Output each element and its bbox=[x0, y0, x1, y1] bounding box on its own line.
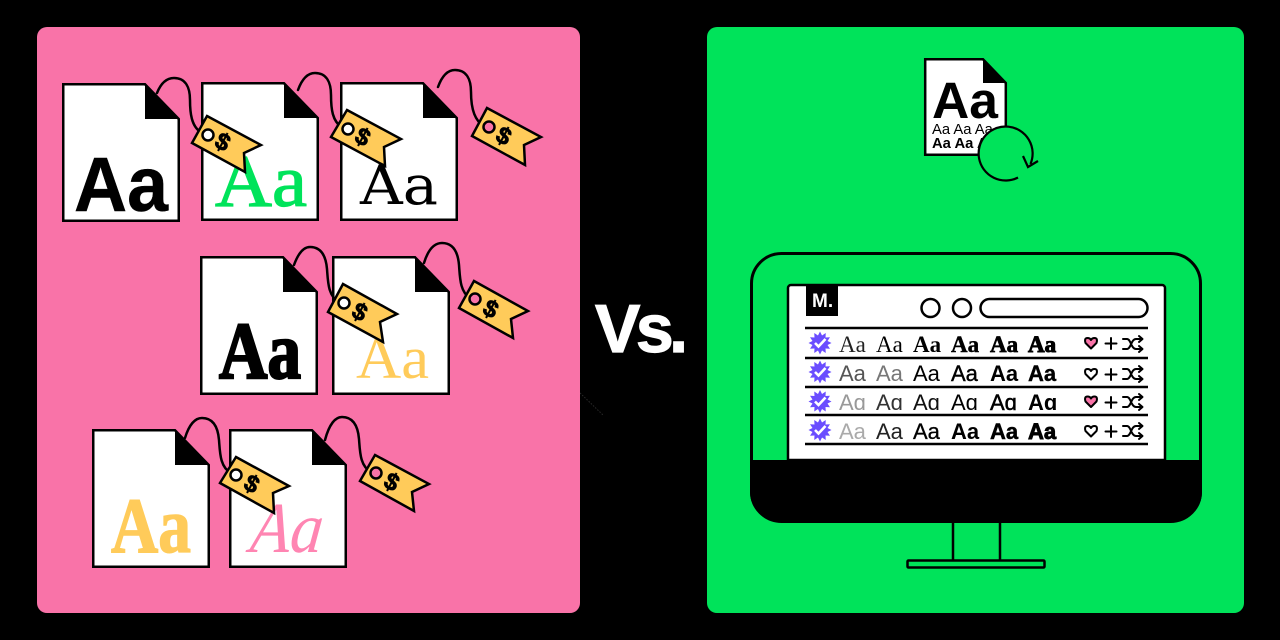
browser window bbox=[788, 285, 1165, 460]
row 4: Aa bbox=[913, 419, 941, 444]
row 3: Aɑ bbox=[913, 390, 940, 415]
icon: font file with refresh cycle: Aa Aa Aa bbox=[932, 122, 994, 138]
file: green serif Aa: Aa bbox=[215, 141, 307, 223]
row 2: Aa bbox=[990, 361, 1019, 386]
row 2: Aa bbox=[913, 361, 941, 386]
browser controls bbox=[922, 299, 1148, 317]
price tag 3: $ bbox=[491, 121, 516, 152]
file: yellow light serif Aa: Aa bbox=[356, 325, 429, 391]
row 4: Aa bbox=[990, 419, 1019, 444]
icon: font file with refresh cycle: Aa Aa Aa bbox=[932, 136, 997, 152]
price tag 1 bbox=[157, 78, 261, 172]
row 1: Aa bbox=[1028, 332, 1057, 357]
row 1: Aa bbox=[876, 332, 903, 357]
row 2: Aa bbox=[839, 361, 867, 386]
row 3: Aɑ bbox=[876, 390, 903, 415]
price tag 5: $ bbox=[478, 294, 503, 325]
row 1: Aa bbox=[951, 332, 980, 357]
file: green serif Aa bbox=[202, 83, 318, 223]
row 2 bbox=[839, 361, 1057, 386]
monitor stand bbox=[908, 522, 1044, 568]
row 4: Aa bbox=[1028, 419, 1057, 444]
heading: Vs.: Vs. bbox=[595, 291, 684, 367]
price tag 6 bbox=[185, 418, 289, 513]
row 2: Aa bbox=[876, 361, 904, 386]
row 3: Aɑ bbox=[1028, 390, 1057, 415]
file: pink italic Aa: Aa bbox=[244, 488, 328, 568]
price tag 2 bbox=[298, 73, 401, 166]
row 4: Aa bbox=[876, 419, 904, 444]
row 1: Aa bbox=[913, 332, 942, 357]
file: yellow light serif Aa bbox=[333, 257, 449, 394]
file: black slab Aa bbox=[341, 83, 457, 220]
logo: M.: M. bbox=[812, 291, 833, 312]
panel: green subscription bbox=[707, 27, 1244, 613]
icon: font file with refresh cycle bbox=[925, 59, 1038, 181]
row 4: Aa bbox=[951, 419, 980, 444]
row 2: Aa bbox=[951, 361, 979, 386]
row 2: Aa bbox=[1028, 361, 1057, 386]
row 3: Aɑ bbox=[839, 390, 866, 415]
file: yellow bold serif Aa: Aa bbox=[111, 482, 191, 569]
row 3: Aɑ bbox=[990, 390, 1017, 415]
file: black sans Aa: Aa bbox=[74, 142, 169, 228]
monitor chin bbox=[750, 460, 1202, 522]
file: black slab Aa: Aa bbox=[359, 154, 438, 217]
price tag 1: $ bbox=[210, 127, 235, 158]
price tag 4: $ bbox=[347, 297, 372, 328]
row 3 bbox=[839, 390, 1057, 415]
logo: M. bbox=[806, 285, 838, 316]
price tag 5 bbox=[424, 243, 528, 338]
price tag 4 bbox=[294, 247, 397, 342]
file: yellow bold serif Aa bbox=[93, 430, 209, 569]
icon: font file with refresh cycle: Aa bbox=[932, 72, 999, 129]
price tag 3 bbox=[438, 70, 541, 165]
row 1: Aa bbox=[839, 332, 866, 357]
icons: verified badges bbox=[808, 332, 832, 442]
file: black display Aa bbox=[201, 257, 317, 396]
file: pink italic Aa bbox=[230, 430, 346, 568]
price tag 2: $ bbox=[350, 122, 375, 153]
price tag 6: $ bbox=[239, 469, 264, 500]
price tag 7: $ bbox=[379, 467, 404, 498]
row 1: Aa bbox=[990, 332, 1019, 357]
monitor bbox=[750, 254, 1202, 568]
panel: pink font files bbox=[37, 27, 580, 613]
row 1 bbox=[839, 332, 1057, 357]
file: black sans Aa bbox=[63, 84, 179, 228]
icons: hearts, plus, shuffle bbox=[1085, 336, 1142, 439]
font list rows bbox=[805, 328, 1148, 444]
row 4: Aa bbox=[839, 419, 867, 444]
row 3: Aɑ bbox=[951, 390, 978, 415]
price tag 7 bbox=[325, 417, 429, 511]
row 4 bbox=[839, 419, 1057, 444]
file: black display Aa: Aa bbox=[219, 308, 301, 396]
